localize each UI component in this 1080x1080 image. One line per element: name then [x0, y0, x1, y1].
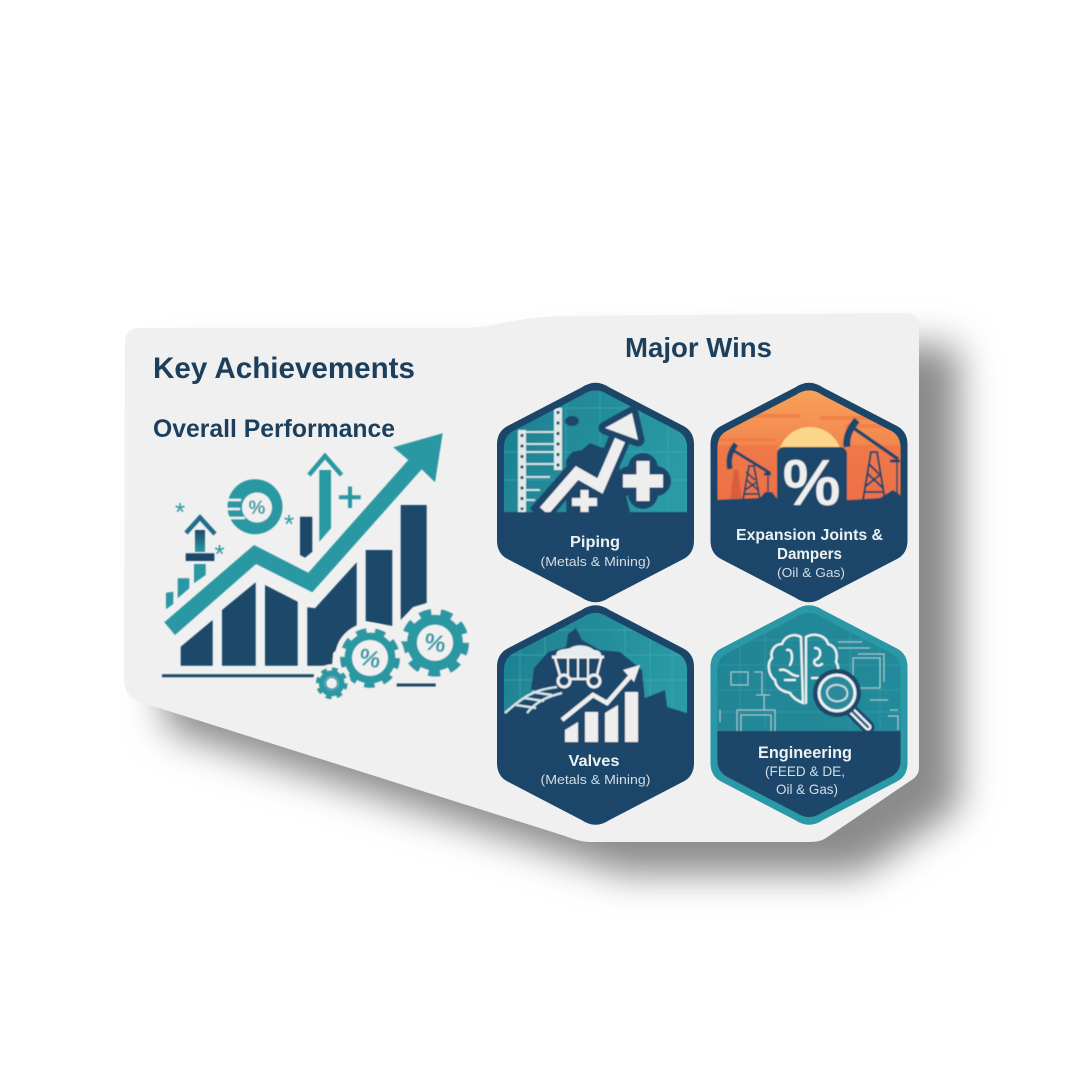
percent tile: [777, 447, 847, 507]
label: Engineering: Engineering: [758, 743, 852, 762]
label: Expansion Joints and Dampers: [736, 527, 883, 563]
bar chart columns: [181, 505, 427, 666]
heading: Key Achievements: Key Achievements: [153, 352, 415, 385]
icon: piping scene with arrow and plus signs: [504, 390, 688, 513]
chart baseline: [162, 676, 436, 685]
small rising steps with up arrow: [166, 518, 215, 609]
badge: Piping: [497, 382, 694, 612]
icon: oil pumpjacks at sunset with percent: [717, 390, 901, 506]
asterisks: [175, 497, 294, 569]
right pumpjack: [847, 420, 900, 500]
badge frame: [710, 383, 908, 602]
percent coin icon: [222, 479, 282, 534]
label: Metals and Mining: (Metals & Mining): [540, 554, 650, 569]
left pumpjack: [729, 444, 771, 500]
tall teal up arrow: [309, 456, 342, 542]
badge frame: [710, 605, 908, 825]
large gear with percent: %: [422, 628, 448, 659]
small gear: [313, 664, 351, 702]
badge: Expansion Joints and Dampers: [710, 382, 910, 611]
large gear with percent: [397, 605, 473, 681]
panel shadow: [164, 345, 959, 874]
label: FEED and DE, Oil and Gas: [765, 763, 845, 797]
asterisks: *: [175, 497, 185, 527]
medium gear with percent: [335, 623, 405, 693]
asterisks: *: [284, 509, 294, 539]
icon: oil pumpjacks at sunset with percent: %: [783, 446, 840, 519]
icon: brain, magnifier and schematics: [717, 613, 901, 818]
ground silhouette: [717, 490, 901, 502]
label: Expansion Joints and Dampers: Dampers: [777, 546, 842, 563]
brain: [769, 635, 838, 703]
asterisks: *: [214, 539, 225, 569]
label: FEED and DE, Oil and Gas: Oil & Gas): [776, 781, 838, 797]
heading: Major Wins: Major Wins: [625, 332, 772, 363]
plus signs: [630, 468, 656, 494]
heading: Overall Performance: Overall Performance: [153, 415, 395, 443]
rails: [505, 687, 562, 713]
label: Oil and Gas: (Oil & Gas): [777, 565, 845, 580]
icon: mine cart, rails and bar chart: [504, 612, 688, 743]
plus sign: [339, 486, 361, 508]
growth arrow: [538, 438, 620, 516]
chart: overall performance growth illustration: [162, 433, 473, 702]
panel: card background: [124, 313, 919, 842]
label: Piping: Piping: [570, 534, 620, 551]
ladder rails: [518, 408, 562, 512]
mountain silhouette: [504, 628, 688, 743]
label: Valves: Valves: [568, 753, 620, 770]
label: FEED and DE, Oil and Gas: (FEED & DE,: [765, 763, 845, 779]
schematics: [720, 642, 898, 731]
mine cart: [552, 645, 604, 687]
badge frame: [497, 383, 694, 602]
label: Expansion Joints and Dampers: Expansion Joints &: [736, 527, 883, 544]
medium gear with percent: %: [357, 644, 383, 674]
badge: Valves: [497, 605, 694, 825]
percent coin icon: %: [249, 498, 266, 519]
badge frame: [497, 605, 694, 825]
label: Metals and Mining: (Metals & Mining): [540, 772, 650, 787]
badge: Engineering: [710, 605, 908, 831]
main rising trend arrow: [164, 433, 443, 635]
growth arrow: [562, 672, 634, 720]
magnifier: [813, 669, 868, 727]
white bars: [565, 692, 638, 742]
